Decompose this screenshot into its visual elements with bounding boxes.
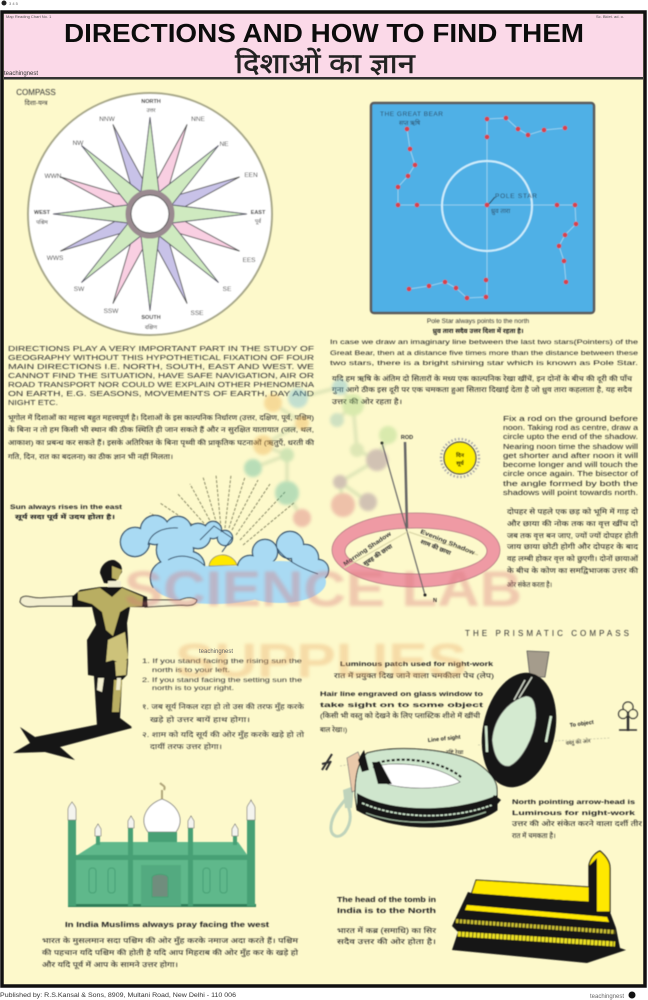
text block: rod method: become longer and will touch the (503, 460, 638, 469)
text block: directions intro hindi (8, 413, 314, 461)
direction labels: EES (242, 257, 256, 264)
text block: facing the sun, hindi: खड़े हो उत्तर बायें हाथ होगा। (150, 715, 250, 724)
text block: rod method hindi: वह लम्बी होकर वृत्त को छुएगी। दोनों छायाओं (507, 554, 639, 563)
prismatic compass labels: Hair line engraved on glass window to (320, 691, 483, 698)
text block: directions intro hindi: गति, दिन, रात का बदलना) का ठीक ज्ञान भी नहीं मिलता। (8, 452, 173, 461)
rod and shadow circle diagram: सुबह की छाया (362, 542, 394, 568)
secondary points (57, 121, 243, 307)
mosque caption: की पहचान यदि पश्चिम की होती है यदि आप मिहराब की ओर मुँह कर के खड़े हो (42, 948, 298, 957)
direction labels: WEST (34, 210, 51, 216)
text block: facing the sun, english: north is to your left. (152, 667, 230, 674)
star map labels (380, 111, 537, 215)
sun rises caption (10, 504, 123, 522)
prismatic compass labels: दृष्टि रेखा (446, 748, 464, 756)
prismatic compass labels: Line of sight (428, 735, 461, 744)
sun rays (150, 475, 295, 545)
mosque caption (42, 920, 299, 970)
mosque caption: In India Muslims always pray facing the west (65, 920, 270, 929)
ring loop (331, 800, 350, 836)
star map labels: ध्रुव तारा (491, 208, 510, 215)
pole star caption: Pole Star always points to the north (427, 318, 530, 325)
text block: rod method: Nearing noon time the shadow will (503, 442, 638, 451)
text block: facing the sun, hindi (142, 702, 305, 751)
clouds fill (121, 516, 328, 604)
direction labels: NE (219, 141, 229, 148)
text block: rod method: circle once again. The bisector of (503, 469, 638, 478)
text block: directions intro hindi: आकाश) का प्रबन्ध कर सकते हैं। इसके अतिरिक्त के बिना पृथ्वी की प्राकृतिक घटनाओं (ऋतुएँ, धरती की (8, 438, 314, 447)
text block: pole star hindi: यदि हम ऋषि के अंतिम दो सितारों के मध्य एक काल्पनिक रेखा खींचें, इन दोनों के बीच की दूरी की पाँच (332, 374, 633, 383)
direction labels: SSE (190, 310, 204, 317)
direction labels: SW (74, 286, 85, 293)
prismatic compass labels: Luminous patch used for night-work (340, 661, 493, 668)
watermark: science lab supplies: SUPPLIES (175, 635, 467, 688)
text block: directions intro hindi: भूगोल में दिशाओं का महत्त्व बहुत महत्त्वपूर्ण है। दिशाओं के इस काल्पनिक निर्धारण (उत्तर, दक्षिण, पूर्व, पश्चिम) (8, 413, 314, 423)
text block: rod method: shadows will point towards north. (503, 488, 638, 497)
minarets (68, 820, 255, 906)
sunrise illustration (121, 475, 328, 604)
rod and shadow circle diagram: Evening Shadow (419, 529, 476, 557)
text block: rod method: get shorter and after noon it will (503, 451, 639, 460)
publisher footer: Published by: R.S.Kansal & Sons, 8909, Multani Road, New Delhi - 110 006 (0, 992, 236, 999)
text block: facing the sun, hindi: दायीं तरफ उत्तर होगा। (150, 742, 222, 751)
star map labels: सप्त ऋषि (399, 119, 421, 127)
sight lines (340, 738, 610, 766)
compass heading: दिशा-यन्त्र (25, 99, 48, 107)
direction labels: NORTH (141, 99, 161, 105)
text block: rod method: Fix a rod on the ground before (503, 414, 638, 423)
text block: facing the sun, hindi: १. जब सूर्य निकल रहा हो तो उस की तरफ मुँह करके (142, 702, 305, 712)
watermark labels (199, 649, 624, 1000)
main points (53, 117, 247, 311)
icon: tree (618, 702, 638, 731)
text block: directions intro: CANNOT FIND THE SITUATION, HAVE SAFE NAVIGATION, AIR OR (8, 371, 314, 380)
title band: दिशाओं का ज्ञान (235, 47, 415, 79)
publisher footer: 3 4 5 (9, 1, 19, 6)
direction labels: WWN (45, 173, 62, 180)
text block: directions intro hindi: के बिना न तो हम किसी भी स्थान की ठीक स्थिति ही जान सकते हैं और न सुरक्षित यातायात (जल, थल, (8, 425, 314, 434)
direction labels: दक्षिण (145, 323, 158, 331)
prismatic compass labels: रात में प्रयुक्त दिख जाने वाला चमकीला पेच (लेप) (334, 671, 494, 680)
text block: rod method: noon. Taking rod as centre, draw a (503, 423, 638, 432)
direction labels: SE (223, 286, 232, 293)
text block: rod method hindi: के बीच के कोण का समद्विभाजक उत्तर की (507, 566, 638, 575)
watermark: science lab supplies (124, 379, 522, 688)
text block: facing the sun, english (142, 658, 302, 692)
mosque caption: भारत के मुसलमान सदा पश्चिम की ओर मुँह करके नमाज अदा करते हैं। पश्चिम (42, 936, 299, 945)
rod and shadow circle diagram: ROD (401, 435, 413, 441)
text block: facing the sun, english: 2. If you stand facing the setting sun the (142, 677, 302, 684)
prismatic compass labels: take sight on to some object (320, 702, 484, 709)
prismatic compass heading: THE PRISMATIC COMPASS (465, 629, 629, 638)
pole star circle (442, 161, 532, 251)
tomb caption (337, 895, 437, 946)
text block: rod method (503, 414, 639, 497)
direction labels: EEN (244, 172, 258, 179)
text block: rod method hindi: जाय छाया छोटी होगी और दोपहर के बाद (507, 543, 638, 551)
watermark: science lab supplies: SCIENCE LAB (124, 561, 522, 617)
prismatic compass labels: बाल रेखा।) (320, 726, 347, 734)
direction labels: SOUTH (141, 315, 161, 321)
text block: rod method: the angle formed by both the (503, 479, 638, 488)
centre ring (128, 192, 172, 236)
cloud inner lines (148, 526, 318, 574)
text block: rod method hindi: दोपहर से पहले एक छड़ को भूमि में गाड़ दो (507, 507, 638, 517)
prismatic compass labels (320, 661, 642, 840)
tomb caption: The head of the tomb in (337, 895, 436, 904)
text block: directions intro: ROAD TRANSPORT NOR COULD WE EXPLAIN OTHER PHENOMENA (8, 380, 314, 389)
direction labels: SSW (104, 308, 119, 315)
tomb caption: सदैव उत्तर की ओर होता है। (337, 937, 436, 946)
rod and shadow circle diagram: N (433, 598, 437, 604)
compass heading (16, 88, 56, 107)
tomb caption: India is to the North (337, 906, 436, 915)
watermark labels: teachingnest (199, 649, 233, 655)
text block: pole star hindi (332, 374, 633, 406)
direction labels: NNW (99, 116, 116, 123)
star map labels: POLE STAR (495, 193, 537, 200)
arms (20, 596, 74, 607)
text block: rod method hindi: ओर संकेत करता है। (507, 581, 552, 589)
direction labels: WWS (47, 255, 64, 262)
man with outstretched arms (13, 560, 197, 760)
text block: facing the sun, english: 1. If you stand facing the rising sun the (142, 658, 302, 665)
tomb illustration (452, 851, 626, 963)
text block: directions intro: NIGHT ETC. (8, 398, 58, 407)
prismatic compass labels: (किसी भी वस्तु को देखने के लिए प्लास्टिक शीशे में खींची (320, 711, 480, 720)
direction labels: NNE (191, 116, 206, 123)
text block: rod method: circle upto the end of the shadow. (503, 432, 638, 441)
sun with hindi label: सूर्य (456, 460, 465, 468)
sun rises caption: Sun always rises in the east (10, 504, 123, 511)
base (355, 749, 497, 827)
text block: pole star explanation: In case we draw an imaginary line between the last two stars(Pointers) of the (330, 339, 638, 346)
mosque caption: और यदि पूर्व में आप के सामने उत्तर होगा। (42, 960, 178, 970)
direction labels: पूर्व (255, 218, 262, 226)
compass heading: COMPASS (16, 88, 56, 97)
text block: pole star explanation (330, 339, 638, 367)
sun with hindi label (441, 439, 479, 477)
title band (4, 14, 643, 80)
body (72, 587, 148, 728)
mosque illustration (68, 783, 256, 907)
direction labels: NW (73, 140, 84, 147)
pole star caption: ध्रुव तारा सदैव उत्तर दिशा में रहता है। (432, 327, 524, 335)
text block: pole star hindi: गुना आगे ठीक इस दूरी पर एक चमकता हुआ सितारा दिखाई देता है जो ध्रुव तारा कहलाता है, यह सदैव (332, 385, 632, 395)
prismatic compass labels: To object (569, 720, 594, 729)
text block: rod method hindi: और छाया की नोक तक का वृत्त खींच दो (507, 519, 638, 528)
direction labels (34, 99, 266, 331)
prismatic compass labels: Luminous for night-work (512, 810, 635, 817)
text block: rod method hindi (507, 507, 639, 589)
text block: pole star explanation: Great Bear, then at a distance five times more than the distance between these (330, 350, 638, 357)
text block: directions intro: ON EARTH, E.G. SEASONS, MOVEMENTS OF EARTH, DAY AND (8, 389, 314, 398)
text block: pole star explanation: two stars, there is a bright shining star which is known as Pole Star. (330, 360, 638, 367)
prismatic compass labels: रात में चमकता है। (512, 831, 556, 840)
star map labels: THE GREAT BEAR (380, 111, 443, 118)
prismatic compass illustration (331, 651, 566, 836)
direction labels: उत्तर (146, 108, 156, 114)
title band: teachingnest (4, 71, 38, 77)
icon: eye (322, 754, 332, 770)
prismatic compass labels: वस्तु की ओर (565, 736, 592, 747)
lid (472, 666, 566, 794)
direction labels: EAST (251, 210, 266, 216)
clouds outline (121, 516, 328, 595)
compass rose (28, 93, 272, 335)
sun rises caption: सूर्य सदा पूर्व में उदय होता है। (15, 513, 115, 522)
tab on lid (527, 651, 549, 677)
text block: directions intro: GEOGRAPHY WITHOUT THIS HYPOTHETICAL FIXATION OF FOUR (8, 353, 314, 362)
tomb caption: भारत में कब्र (समाधि) का सिर (337, 926, 437, 935)
text block: facing the sun, english: north is to your right. (152, 685, 234, 692)
prismatic compass labels: North pointing arrow-head is (512, 799, 635, 806)
sun with hindi label: दिन (456, 451, 465, 459)
dome (144, 799, 180, 832)
rod and shadow circle diagram: शाम की छाया (419, 537, 452, 557)
prismatic compass labels: उत्तर की ओर संकेत करने वाला दर्शी तीर (512, 819, 642, 828)
text block: directions intro: DIRECTIONS PLAY A VERY IMPORTANT PART IN THE STUDY OF (8, 344, 315, 353)
watermark labels: teachingnest (590, 994, 624, 1000)
door (141, 865, 181, 906)
wall (68, 842, 248, 906)
text block: facing the sun, hindi: २. शाम को यदि सूर्य की ओर मुँह करके खड़े हो तो (142, 730, 304, 740)
text block: pole star hindi: उत्तर की ओर रहता है। (332, 397, 402, 406)
title band: Map Reading Chart No. 1 (6, 14, 52, 19)
text block: directions intro: MAIN DIRECTIONS I.E. NORTH, SOUTH, EAST AND WEST. WE (8, 362, 314, 371)
rod and shadow circle diagram: Morning Shadow (343, 531, 393, 568)
direction labels: पश्चिम (36, 218, 49, 226)
windows (89, 868, 227, 893)
title band: DIRECTIONS AND HOW TO FIND THEM (64, 18, 584, 48)
shadow (13, 718, 132, 760)
pole star caption (427, 318, 530, 335)
text block: directions intro (8, 344, 315, 407)
text block: rod method hindi: जब तक वृत्त बन जाए, ज्यों ज्यों दोपहर होती (507, 531, 638, 540)
stars (396, 116, 578, 300)
rod and shadow circle diagram (332, 435, 500, 604)
panel: great bear star map (371, 103, 594, 313)
rising sun (209, 555, 237, 566)
title band: Sc. Bklet. ad. o. (596, 14, 624, 19)
head (100, 560, 122, 584)
